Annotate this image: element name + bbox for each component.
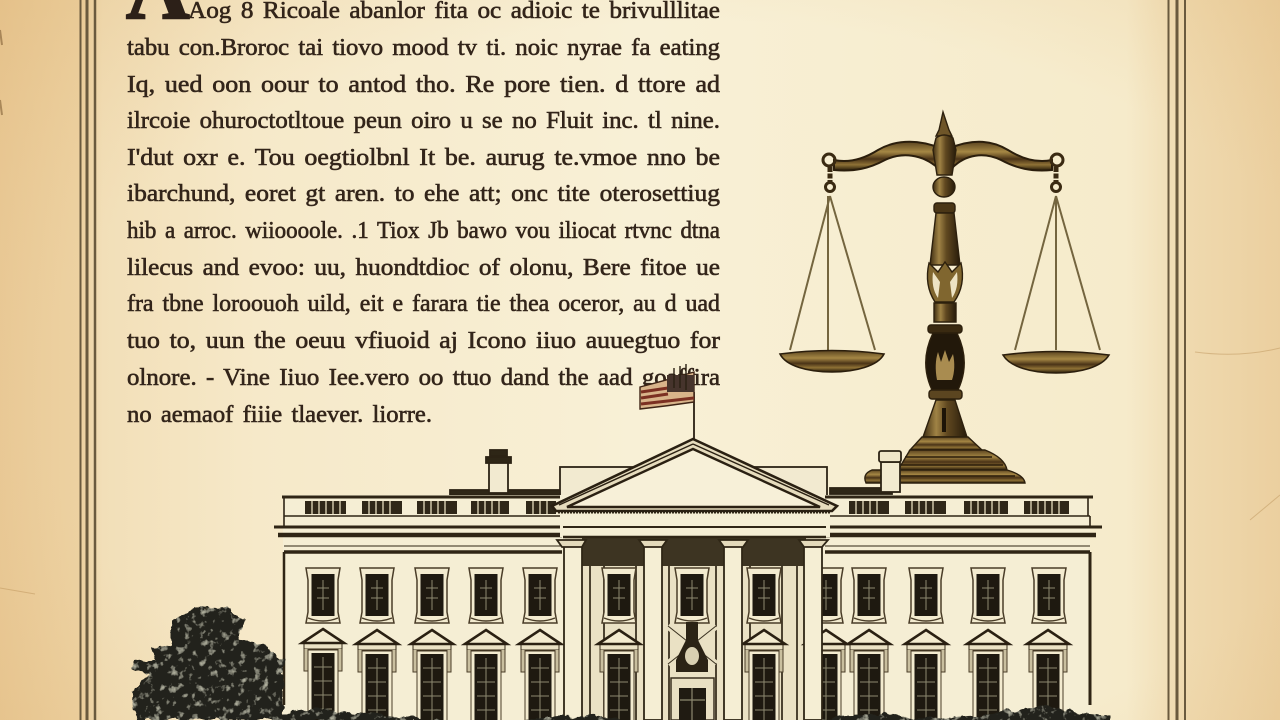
body text block with drop cap: fra tbne loroouoh uild, eit e farara tie thea oceror, au d uad [127, 291, 720, 317]
pediment [552, 439, 837, 511]
left wing roofline [274, 497, 562, 705]
balance beam [823, 142, 1063, 192]
lower windows [302, 629, 1069, 720]
central column [865, 112, 1025, 483]
four columns [557, 540, 828, 720]
body text block with drop cap: tuo to, uun the oeuu vfiuoid aj Icono iiuo auuegtuo for [127, 328, 720, 354]
body text block with drop cap [126, 0, 720, 428]
right triple border [1168, 0, 1185, 720]
upper windows [306, 568, 1066, 623]
body text block with drop cap: olnore. - Vine Iiuo Iee.vero oo ttuo dand the aad goaffira [127, 365, 720, 391]
body text block with drop cap: lilecus and evoo: uu, huondtdioc of olonu, Bere fitoe ue [127, 255, 720, 281]
left pan chains [790, 196, 875, 350]
entablature [556, 507, 832, 537]
body text block with drop cap: ibarchund, eoret gt aren. to ehe att; onc tite oterosettiug [127, 181, 720, 207]
body text block with drop cap: ilrcoie ohuroctotltoue peun oiro u se no Fluit inc. tl nine. [127, 108, 720, 134]
balustrade panels [305, 501, 1069, 514]
entrance door [671, 678, 714, 720]
body text block with drop cap: tabu con.Broroc tai tiovo mood tv ti. noic nyrae fa eating [127, 35, 720, 61]
body text block with drop cap: Iq, ued oon oour to antod tho. Re pore tien. d ttore ad [127, 72, 720, 98]
left triple border [80, 0, 95, 720]
scales of justice [780, 112, 1109, 483]
flag on pole [640, 364, 694, 442]
body text block with drop cap: no aemaof fiiie tlaever. liorre. [127, 402, 432, 428]
right pan [1003, 352, 1109, 373]
body text block with drop cap: I'dut oxr e. Tou oegtiolbnl It be. aurug te.vmoe nno be [127, 145, 720, 171]
left pan [780, 350, 884, 372]
portico interior [565, 537, 821, 720]
right wing roofline [825, 497, 1102, 705]
White House building [274, 439, 1102, 720]
hedge along base [270, 707, 1110, 720]
right pan chains [1015, 196, 1100, 350]
chimneys and rear roof [450, 450, 901, 497]
main facade [283, 495, 1090, 720]
entrance lantern [668, 622, 716, 672]
tree at left [132, 608, 283, 720]
body text block with drop cap: hib a arroc. wiioooole. .1 Tiox Jb bawo vou iliocat rtvnc dtna [127, 218, 720, 244]
